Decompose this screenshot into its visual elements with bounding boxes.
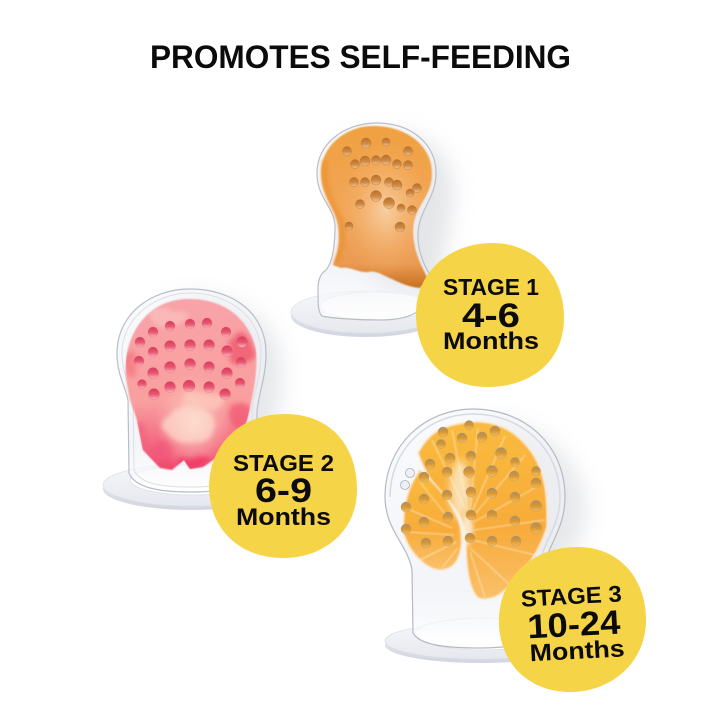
- feeder: stage 3 mandarin: [385, 409, 585, 663]
- feeder: stage 2 pink: [103, 289, 282, 510]
- badge: stage 1: STAGE 1: [443, 274, 539, 300]
- badge: stage 2: 6-9: [255, 472, 312, 510]
- badge: stage 1: [416, 243, 564, 387]
- feeder: stage 1 orange: [291, 123, 453, 337]
- badge: stage 2: [209, 414, 357, 558]
- badge: stage 2: Months: [236, 504, 331, 531]
- title: PROMOTES SELF-FEEDING: [150, 39, 571, 75]
- badge: stage 3: [499, 547, 646, 692]
- badge: stage 1: Months: [443, 328, 539, 355]
- badge: stage 3: STAGE 3: [520, 580, 622, 612]
- badge: stage 3: Months: [529, 635, 625, 667]
- badge: stage 1: 4-6: [462, 297, 520, 335]
- badge: stage 3: 10-24: [526, 604, 621, 646]
- badge: stage 2: STAGE 2: [233, 450, 334, 476]
